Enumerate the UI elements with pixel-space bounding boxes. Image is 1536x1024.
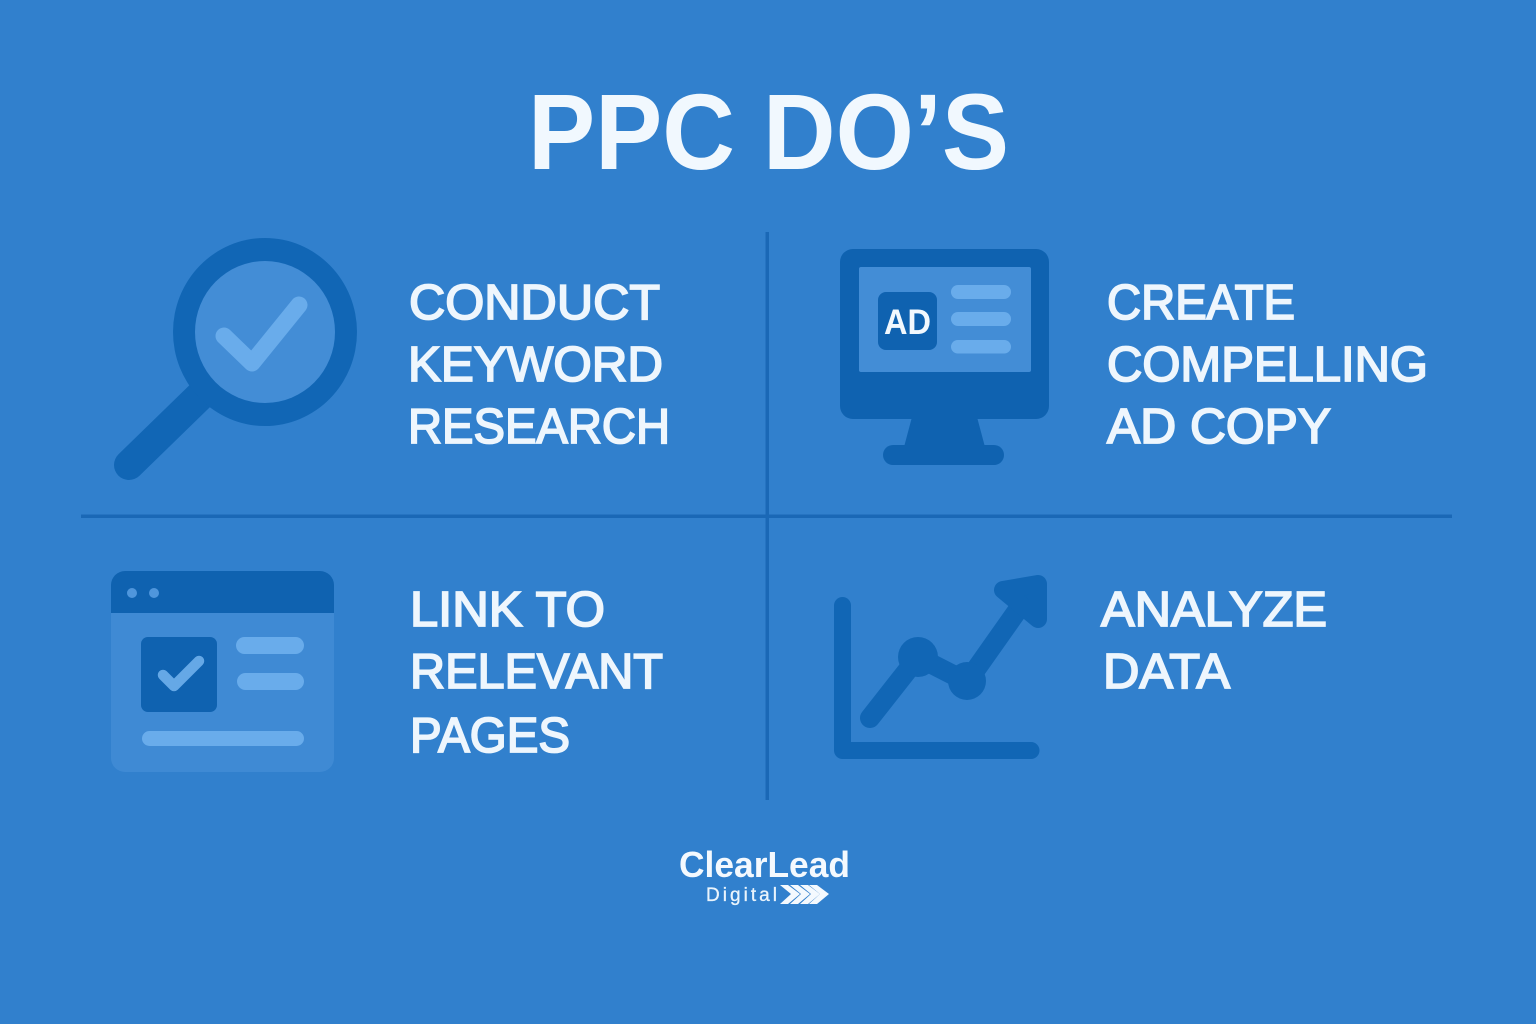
title: PPC DO’S	[528, 71, 1009, 192]
text: conduct keyword research	[408, 275, 670, 454]
icon: logo chevrons	[780, 885, 829, 904]
text: link to relevant pages: LINK TO	[410, 582, 605, 637]
text: link to relevant pages: PAGES	[410, 708, 570, 763]
logo: ClearLead Digital: Digital	[706, 885, 777, 906]
text: conduct keyword research: RESEARCH	[408, 399, 670, 454]
text: analyze data: ANALYZE	[1101, 582, 1327, 637]
text: create compelling ad copy	[1107, 275, 1428, 454]
icon: monitor with ad: AD	[884, 303, 931, 342]
panel: link to relevant pages	[111, 571, 663, 772]
text: conduct keyword research: CONDUCT	[409, 275, 660, 330]
text: create compelling ad copy: CREATE	[1107, 275, 1295, 330]
icon: magnifying glass with check	[129, 238, 357, 465]
text: create compelling ad copy: AD COPY	[1107, 399, 1331, 454]
panel: conduct keyword research	[129, 238, 670, 465]
logo: ClearLead Digital	[679, 844, 850, 906]
text: conduct keyword research: KEYWORD	[408, 337, 663, 392]
text: analyze data	[1101, 582, 1327, 699]
panel: analyze data	[842, 582, 1327, 750]
logo: ClearLead Digital: ClearLead	[679, 844, 850, 885]
text: analyze data: DATA	[1103, 644, 1230, 699]
text: link to relevant pages: RELEVANT	[410, 644, 663, 699]
icon: browser window with check	[111, 571, 334, 772]
icon: line chart with arrow	[842, 584, 1038, 750]
panel: create compelling ad copy	[840, 249, 1428, 465]
text: create compelling ad copy: COMPELLING	[1107, 337, 1428, 392]
text: link to relevant pages	[410, 582, 663, 763]
icon: monitor with ad	[840, 249, 1049, 465]
